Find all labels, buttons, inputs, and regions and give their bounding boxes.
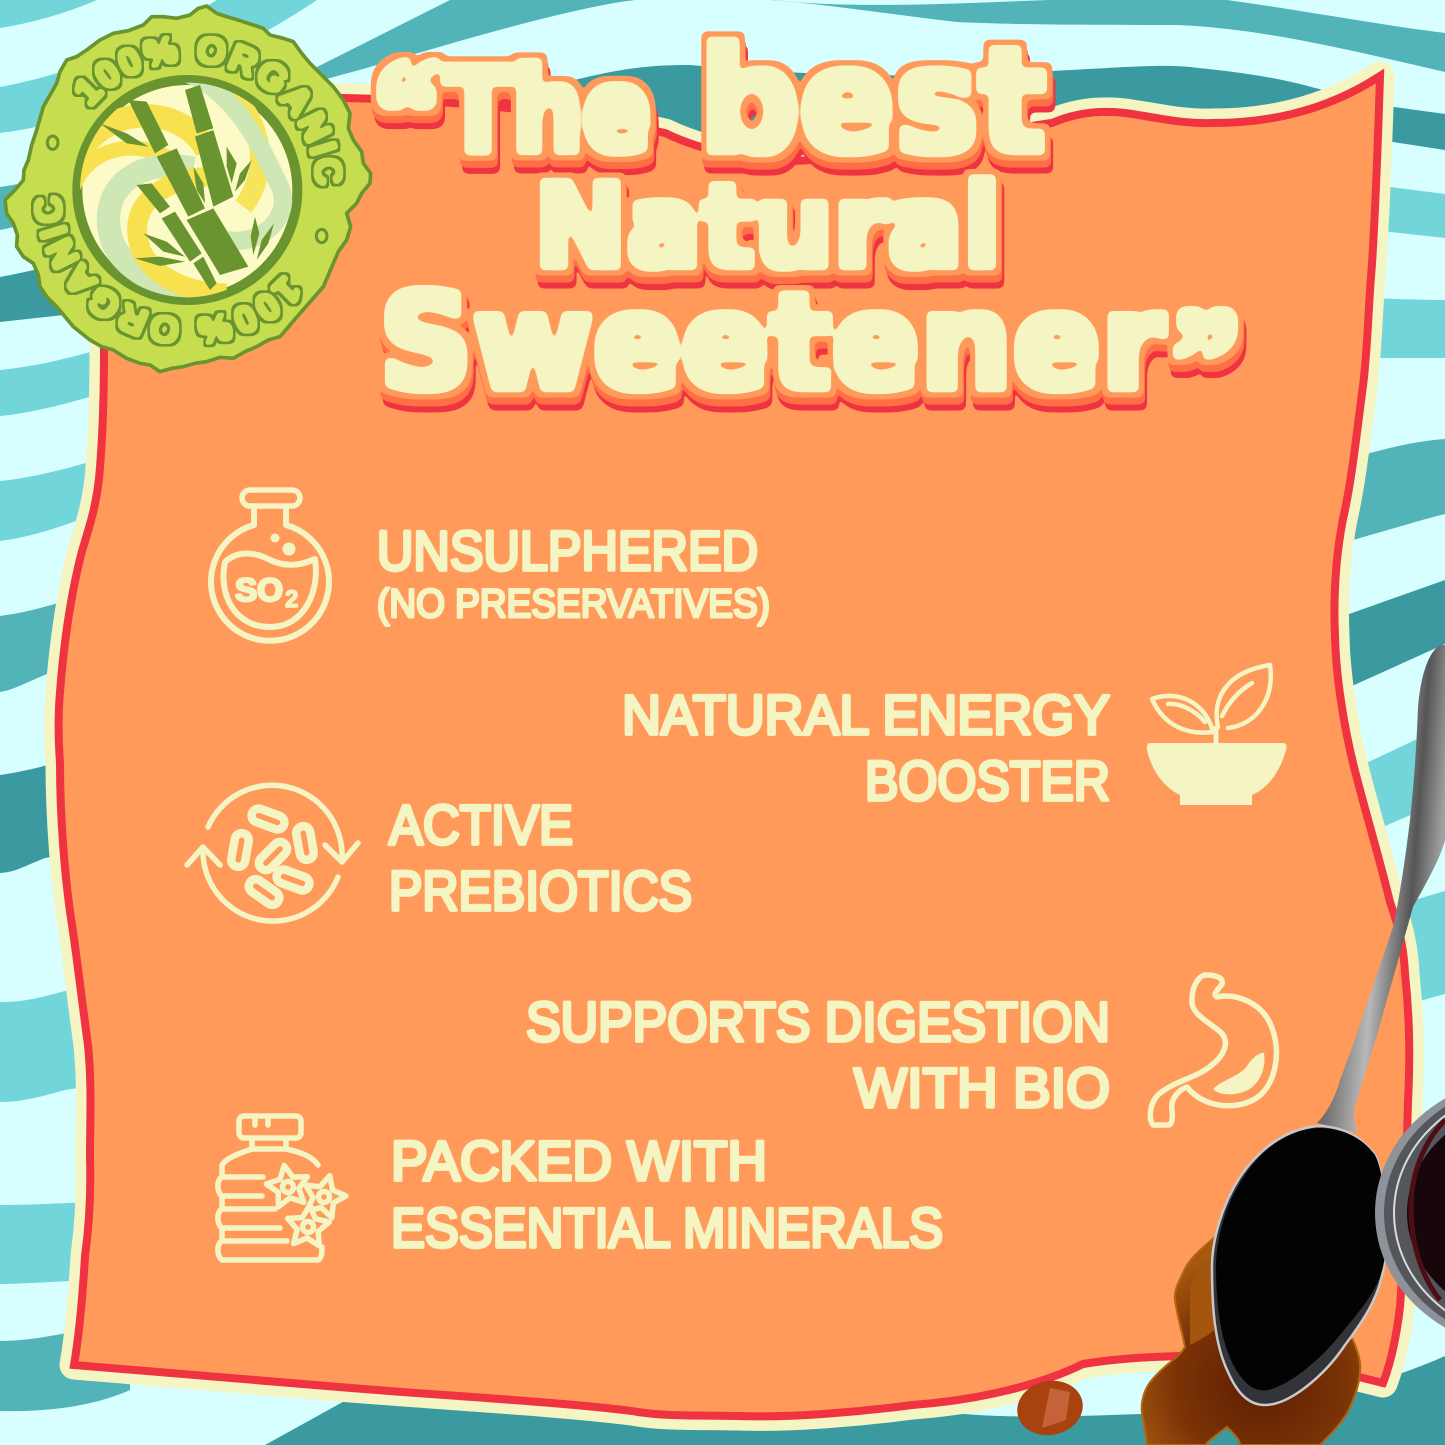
syrup spill <box>1012 1237 1360 1445</box>
text: natural energy booster: BOOSTER <box>865 749 1110 812</box>
text: supports digestion: SUPPORTS DIGESTION <box>526 990 1110 1053</box>
text: packed with minerals: PACKED WITH <box>391 1129 767 1192</box>
icon: plant bowl <box>1147 665 1287 805</box>
title: best <box>699 17 1046 186</box>
text: unsulphered: UNSULPHERED <box>377 519 758 582</box>
icon: stomach <box>1150 975 1276 1125</box>
icon: flask SO2: SO <box>235 572 283 608</box>
icon: flask SO2: 2 <box>285 586 298 613</box>
text: natural energy booster: NATURAL ENERGY <box>622 683 1110 746</box>
title: The <box>444 42 651 179</box>
text: unsulphered <box>377 519 770 626</box>
badge ring and swirl <box>73 73 297 300</box>
badge: 100% organic bamboo seal <box>3 4 372 374</box>
title: ” <box>1172 277 1240 443</box>
spoon <box>1212 645 1445 1405</box>
badge bamboo <box>100 85 274 290</box>
badge dots <box>47 136 327 243</box>
title <box>374 17 1240 443</box>
text: supports digestion: WITH BIO <box>854 1056 1110 1119</box>
text: supports digestion <box>526 990 1110 1119</box>
icon: prebiotics bacteria cycle <box>187 785 358 921</box>
title: Sweetener <box>379 266 1165 420</box>
title: Natural <box>534 160 1001 294</box>
title: “ <box>374 28 440 194</box>
icon: flask SO2 <box>211 490 329 641</box>
text: active prebiotics <box>389 793 692 922</box>
badge ring text: 100% ORGANIC <box>72 33 346 188</box>
jar <box>1375 1076 1445 1350</box>
text: packed with minerals <box>391 1129 943 1259</box>
text: active prebiotics: ACTIVE <box>389 793 573 856</box>
icon: mineral bottle <box>218 1116 350 1260</box>
text: packed with minerals: ESSENTIAL MINERALS <box>391 1196 943 1259</box>
text: active prebiotics: PREBIOTICS <box>389 859 692 922</box>
badge ring text <box>31 33 346 348</box>
text: unsulphered: (NO PRESERVATIVES) <box>377 582 770 626</box>
text: natural energy booster <box>622 683 1110 812</box>
badge ring text: 100% ORGANIC <box>31 192 303 348</box>
